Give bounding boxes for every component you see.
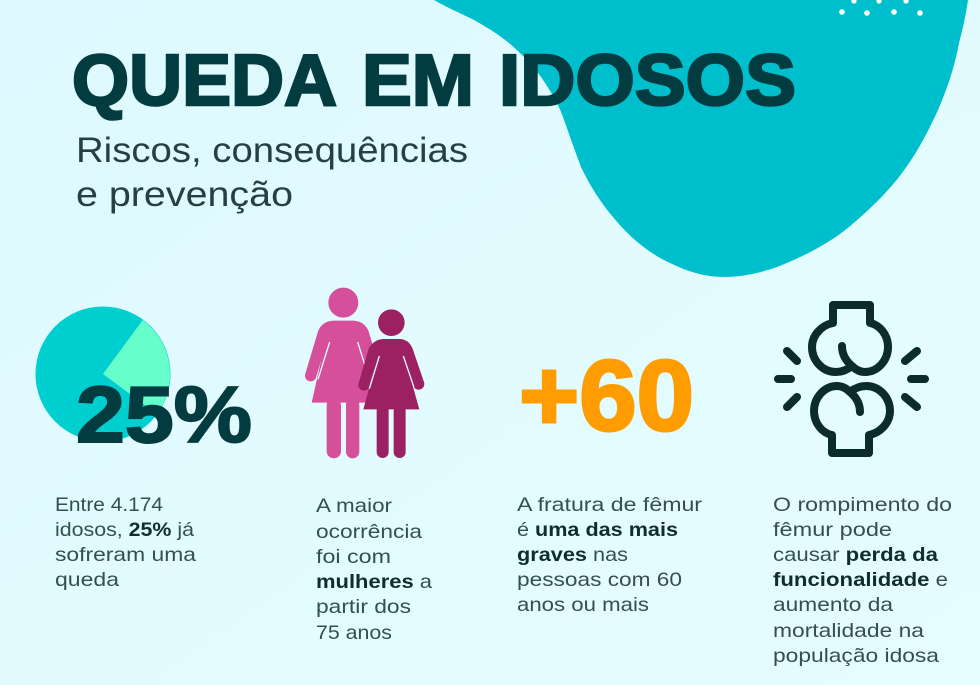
text: rompimento do femur — [773, 494, 952, 667]
decorative dots — [839, 0, 923, 16]
statistic: +60: +60 — [519, 340, 694, 452]
text: rompimento do femur: aumento da — [773, 594, 893, 616]
panel: plus 60 — [517, 340, 703, 616]
text: maior ocorrencia: foi com — [316, 546, 391, 568]
text: maior ocorrencia: 75 anos — [316, 622, 392, 644]
text: entre 4.174 idosos: sofreram uma — [55, 544, 196, 566]
icon: broken joint — [778, 305, 925, 453]
statistic: 25%: 25% — [76, 370, 252, 459]
pie chart — [36, 306, 170, 442]
title — [72, 41, 796, 121]
text: fratura de femur: é uma das mais — [517, 519, 678, 541]
icon: smaller woman — [363, 309, 419, 458]
text: maior ocorrencia: ocorrência — [316, 521, 422, 543]
text: maior ocorrencia — [316, 495, 432, 644]
text: entre 4.174 idosos: Entre 4.174 — [55, 494, 163, 516]
panel: broken femur — [773, 305, 952, 667]
text: rompimento do femur: população idosa — [773, 645, 939, 667]
text: rompimento do femur: causar perda da — [773, 544, 938, 566]
text: rompimento do femur: mortalidade na — [773, 620, 924, 642]
text: entre 4.174 idosos — [55, 494, 196, 591]
text: maior ocorrencia: mulheres a — [316, 571, 432, 593]
title: IDOSOS — [499, 41, 796, 121]
text: maior ocorrencia: partir dos — [316, 596, 411, 618]
panel: women — [311, 288, 432, 644]
text: rompimento do femur: fêmur pode — [773, 519, 892, 541]
text: fratura de femur: A fratura de fêmur — [517, 494, 703, 516]
text: fratura de femur — [517, 494, 703, 616]
text: fratura de femur: pessoas com 60 — [517, 569, 682, 591]
subtitle — [76, 131, 468, 214]
title: QUEDA — [72, 41, 337, 121]
text: entre 4.174 idosos: queda — [55, 569, 119, 591]
panel: 25 percent — [36, 306, 252, 591]
subtitle: e prevenção — [76, 175, 293, 214]
teal background blob — [434, 0, 968, 277]
icon: two women — [311, 288, 419, 458]
subtitle: Riscos, consequências — [76, 131, 468, 170]
text: rompimento do femur: O rompimento do — [773, 494, 952, 516]
text: entre 4.174 idosos: idosos, 25% já — [55, 519, 194, 541]
text: maior ocorrencia: A maior — [316, 495, 393, 517]
text: fratura de femur: anos ou mais — [517, 594, 649, 616]
text: rompimento do femur: funcionalidade e — [773, 569, 948, 591]
text: fratura de femur: graves nas — [517, 544, 628, 566]
title: EM — [362, 41, 474, 121]
icon: larger woman — [311, 288, 376, 458]
